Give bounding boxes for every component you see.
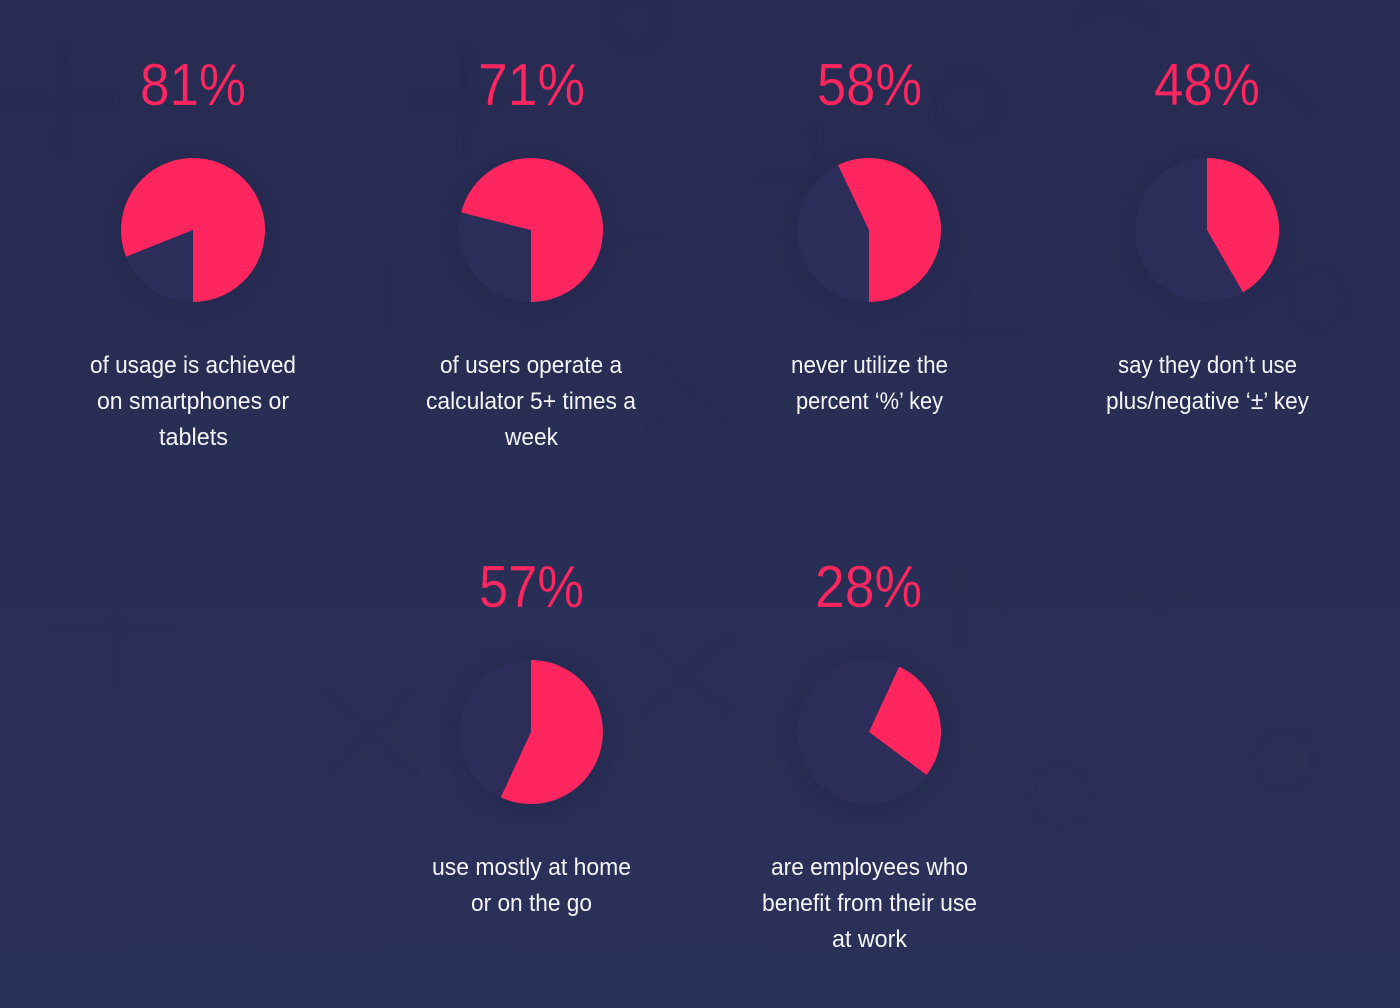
background pattern of faint math symbols, upper half (0, 0, 1347, 428)
pie chart: 81% (93, 136, 293, 336)
pie chart: 28% (769, 638, 969, 838)
value: 58%: 58% (817, 52, 922, 118)
description: 81% (90, 352, 296, 451)
description: 71%: of users operate a (440, 352, 623, 379)
description: 58%: percent ‘%’ key (796, 388, 943, 415)
value: 48%: 48% (1154, 52, 1260, 118)
description: 28%: benefit from their use (762, 890, 977, 917)
description: 58%: never utilize the (791, 352, 948, 379)
pie chart: 57% (431, 638, 631, 838)
description: 28%: at work (832, 926, 908, 953)
description: 71% (426, 352, 637, 451)
description: 48%: say they don’t use (1118, 352, 1297, 379)
stat card: 48% (1106, 52, 1309, 415)
description: 48%: plus/negative ‘±’ key (1106, 388, 1309, 415)
description: 71%: week (504, 424, 559, 451)
value: 81%: 81% (140, 52, 246, 118)
description: 58% (791, 352, 948, 415)
description: 57%: or on the go (471, 890, 592, 917)
stat card: 71% (426, 52, 637, 451)
stat card: 58% (769, 52, 969, 415)
value: 71%: 71% (478, 52, 585, 118)
description: 81%: tablets (159, 424, 228, 451)
description: 28% (762, 854, 977, 953)
pie chart: 58% (769, 136, 969, 336)
value: 28%: 28% (815, 554, 922, 620)
stat card: 81% (90, 52, 296, 451)
pie chart: 71% (431, 136, 631, 336)
description: 57% (432, 854, 631, 917)
description: 48% (1106, 352, 1309, 415)
description: 71%: calculator 5+ times a (426, 388, 637, 415)
pie chart: 48% (1107, 136, 1307, 336)
description: 81%: of usage is achieved (90, 352, 296, 379)
background pattern of faint math symbols, lower half (50, 450, 1395, 826)
description: 28%: are employees who (771, 854, 968, 881)
stat card: 28% (762, 554, 977, 953)
description: 57%: use mostly at home (432, 854, 631, 881)
description: 81%: on smartphones or (97, 388, 289, 415)
stat card: 57% (431, 554, 631, 917)
value: 57%: 57% (479, 554, 584, 620)
